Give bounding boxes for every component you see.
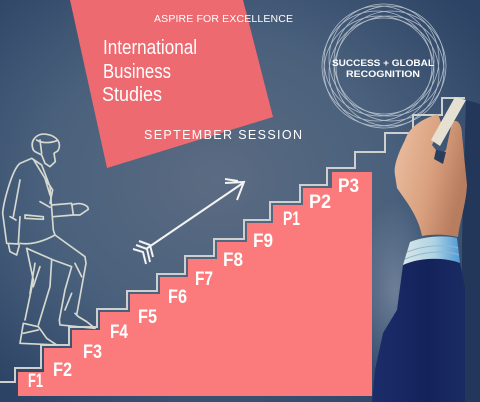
- step labels: P3: [338, 176, 359, 197]
- rosette: success and global recognition: SUCCESS + GLOBAL: [332, 58, 434, 69]
- step labels: F3: [83, 342, 102, 363]
- step labels: [28, 176, 359, 392]
- step labels: F4: [110, 322, 128, 343]
- chalk line drawing: businessman climbing: [3, 134, 95, 345]
- step labels: F5: [138, 307, 157, 328]
- step labels: P2: [309, 192, 331, 213]
- step labels: F2: [53, 360, 72, 381]
- gap between fingers: [434, 150, 446, 164]
- light patch beside the sleeve: [355, 200, 435, 380]
- staircase outline in chalk: [0, 98, 465, 382]
- shirt cuff: [403, 236, 460, 265]
- step labels: F7: [195, 269, 213, 290]
- arrow pointing up the stairs: [133, 179, 244, 264]
- step labels: F8: [223, 250, 243, 271]
- panel: title card: [70, 0, 273, 168]
- subtitle: september session: SEPTEMBER SESSION: [144, 128, 302, 142]
- coral staircase: [18, 172, 372, 396]
- title: International Business Studies: Business: [103, 61, 171, 83]
- hand holding chalk and suit sleeve: [372, 97, 467, 402]
- step labels: F1: [28, 371, 43, 392]
- hand: [395, 114, 467, 237]
- rosette: success and global recognition: RECOGNITION: [346, 69, 420, 80]
- title: International Business Studies: International: [103, 37, 197, 59]
- cuff stripes: [405, 246, 459, 259]
- sleeve: [372, 259, 465, 402]
- step labels: P1: [283, 209, 300, 230]
- title: International Business Studies: Studies: [102, 84, 162, 106]
- shadow behind hand and arm: [462, 100, 480, 402]
- step labels: F9: [253, 231, 273, 252]
- tagline: aspire for excellence: ASPIRE FOR EXCELLENCE: [154, 13, 293, 25]
- rosette: success and global recognition: [322, 4, 446, 128]
- title: International Business Studies: [102, 37, 197, 106]
- step labels: F6: [168, 287, 187, 308]
- chalk: [431, 97, 466, 146]
